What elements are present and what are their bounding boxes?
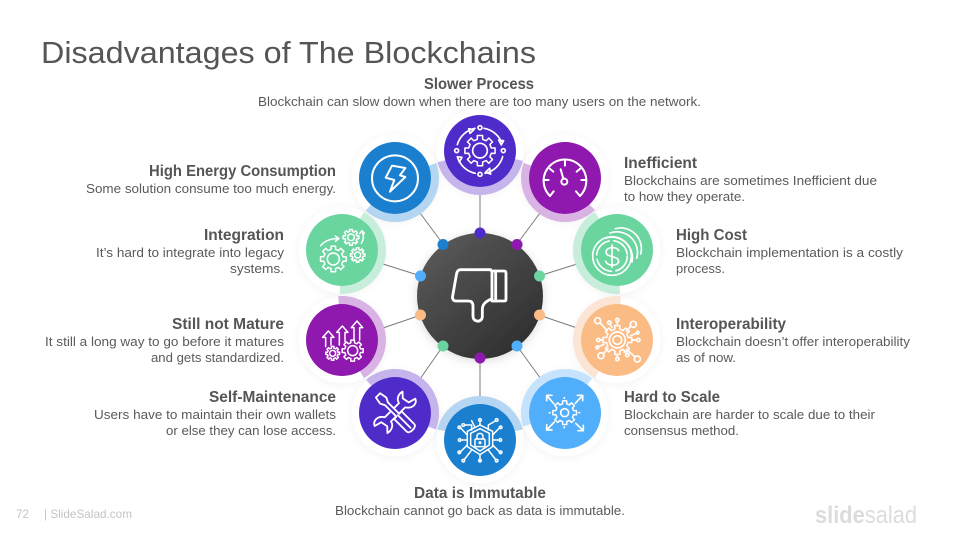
text: Still not Mature: It still a long way to go before it matures — [45, 335, 284, 349]
title: Disadvantages of The Blockchains — [41, 35, 536, 70]
node: Inefficient — [508, 121, 622, 235]
node: High Energy Consumption — [344, 127, 446, 229]
text: High Cost: Blockchain implementation is a costly — [676, 246, 904, 260]
connector dots — [415, 228, 545, 364]
node: Hard to Scale — [515, 363, 615, 463]
text: High Cost: High Cost — [676, 227, 748, 244]
text: Integration: Integration — [204, 227, 284, 244]
text: High Energy Consumption: High Energy Consumption — [149, 163, 336, 180]
text: Self-Maintenance: Self-Maintenance — [209, 389, 336, 406]
text: Self-Maintenance — [94, 389, 336, 438]
text: Interoperability — [676, 316, 911, 365]
text: Integration: systems. — [230, 262, 284, 276]
text: Hard to Scale — [624, 389, 875, 438]
icon: stacked coins — [593, 228, 641, 275]
node: Self-Maintenance — [339, 357, 451, 469]
footer: page number and site: | SlideSalad.com — [44, 507, 132, 521]
text: Hard to Scale: Hard to Scale — [624, 389, 720, 406]
icon: speedometer — [544, 159, 586, 196]
icon: rising arrows and gears — [323, 321, 363, 361]
text: Interoperability: Blockchain doesn’t offer interoperability — [676, 335, 911, 349]
icon: connected gears — [321, 229, 365, 272]
central hub — [417, 233, 543, 359]
text: High Cost: process. — [676, 262, 725, 276]
node: Interoperability — [562, 285, 672, 395]
text: Still not Mature: Still not Mature — [172, 316, 284, 333]
icon: thumbs down — [452, 270, 506, 321]
node: Still not Mature — [298, 296, 386, 384]
text: Hard to Scale: Blockchain are harder to scale due to their — [624, 408, 875, 422]
text: Hard to Scale: consensus method. — [624, 424, 739, 438]
text: Data is Immutable: Blockchain cannot go back as data is immutable. — [335, 504, 625, 518]
text: Integration — [96, 227, 285, 276]
icon: lock circuit — [458, 419, 502, 462]
icon: gear with expanding arrows — [547, 395, 583, 431]
text: Inefficient: Inefficient — [624, 155, 698, 172]
text: Interoperability: as of now. — [676, 351, 736, 365]
text: Self-Maintenance: or else they can lose access. — [166, 424, 336, 438]
connector lines — [383, 195, 577, 397]
icon: lightning bolt in circle — [372, 155, 418, 201]
text: Data is Immutable: Data is Immutable — [414, 485, 546, 502]
text: Slower Process: Slower Process — [424, 76, 534, 93]
icon: wrench and screwdriver — [371, 389, 419, 436]
text: High Energy Consumption — [86, 163, 336, 196]
text: Inefficient: Blockchains are sometimes Inefficient due — [624, 174, 877, 188]
icon: gear network — [595, 318, 640, 362]
node: Data is Immutable — [432, 392, 528, 488]
text: Still not Mature: and gets standardized. — [151, 351, 284, 365]
text: Data is Immutable — [335, 485, 625, 518]
node: High Cost — [574, 206, 660, 294]
text: Inefficient — [624, 155, 877, 204]
text: High Energy Consumption: Some solution consume too much energy. — [86, 182, 336, 196]
icon: gear with cycle arrows — [455, 126, 505, 176]
text: Inefficient: to how they operate. — [624, 190, 745, 204]
text: Slower Process: Blockchain can slow down when there are too many users on the network. — [258, 95, 701, 109]
text: Integration: It’s hard to integrate into legacy — [96, 246, 285, 260]
text: High Cost — [676, 227, 904, 276]
logo: slidesalad: slidesalad — [815, 502, 917, 529]
footer: page number and site: 72 — [16, 507, 29, 521]
text: Self-Maintenance: Users have to maintain their own wallets — [94, 408, 336, 422]
text: Slower Process — [258, 76, 701, 109]
node: Integration — [287, 195, 397, 305]
node: Slower Process — [432, 103, 528, 199]
text: Still not Mature — [45, 316, 284, 365]
text: Interoperability: Interoperability — [676, 316, 786, 333]
